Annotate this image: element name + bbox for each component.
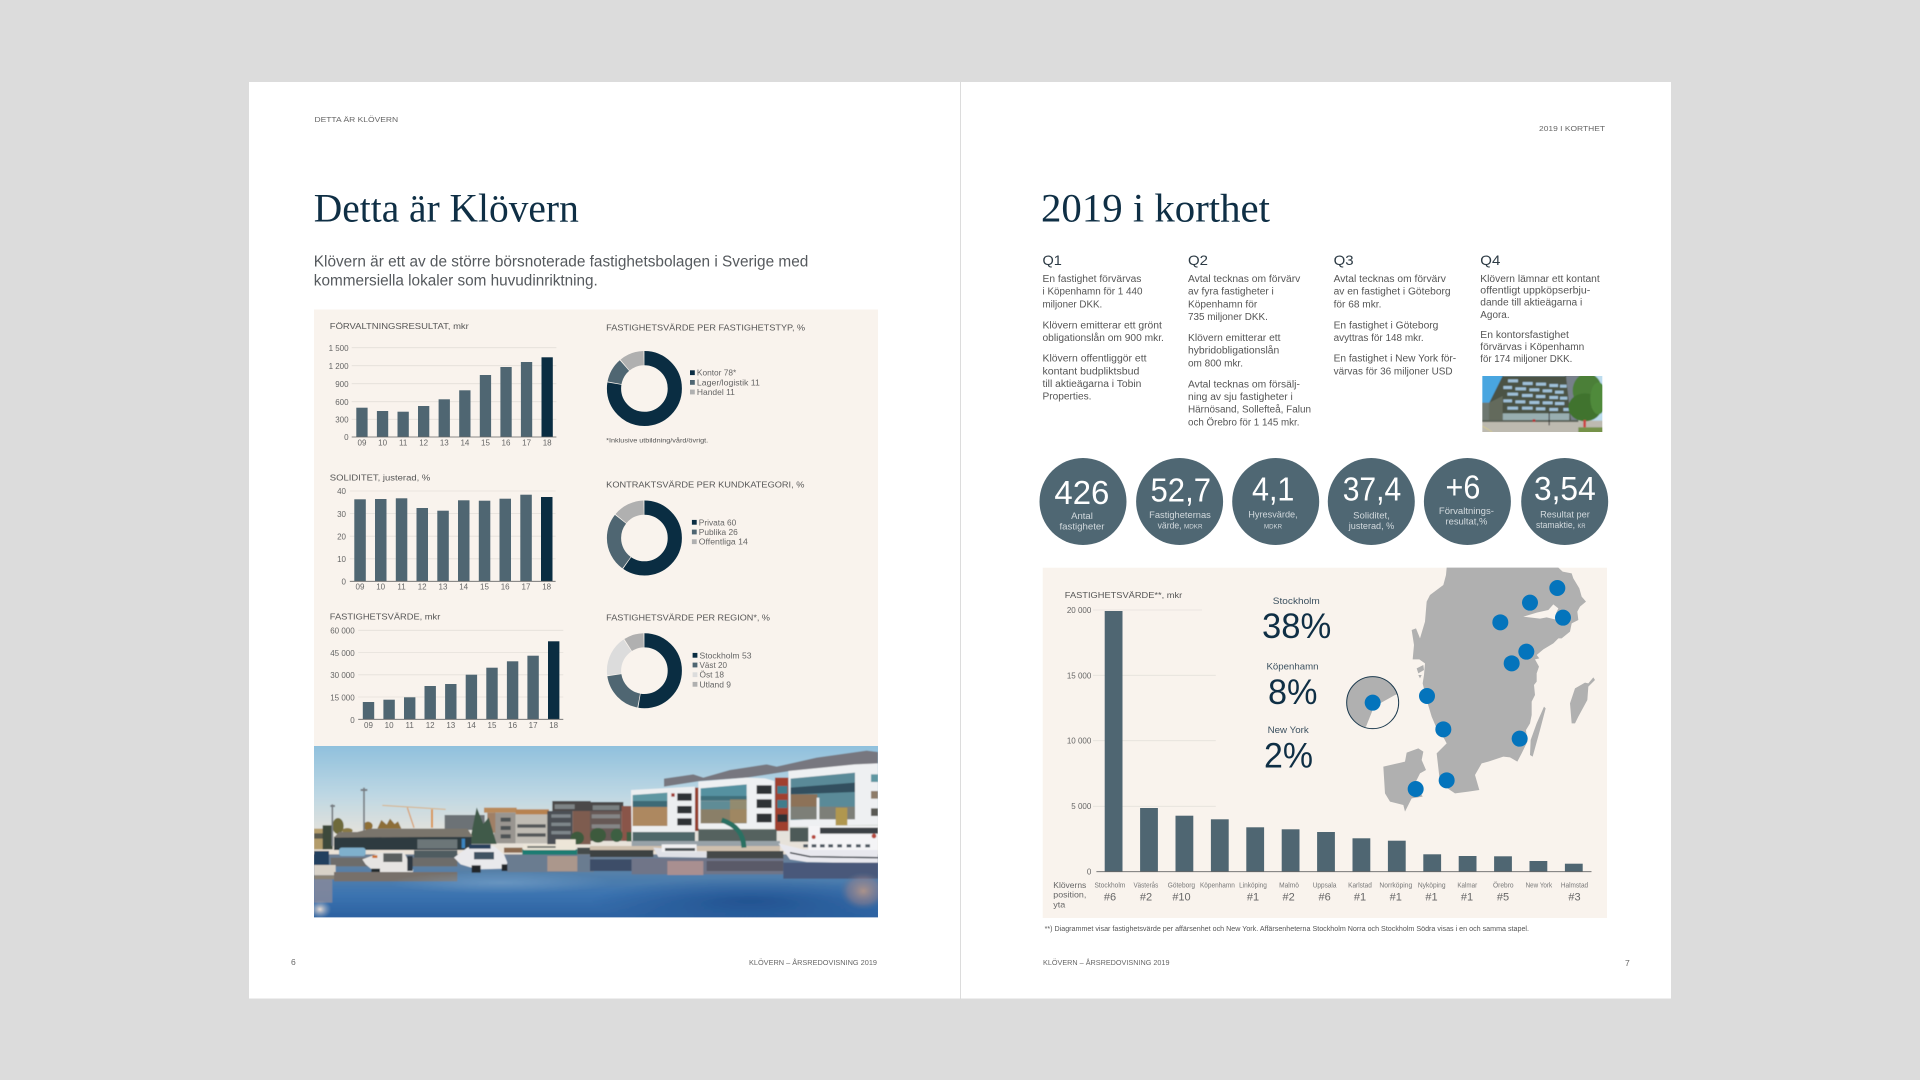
panel: property value chart and map [1043, 568, 1607, 918]
running header left: DETTA ÄR KLÖVERN [314, 115, 398, 124]
text column: Q3: avyttras för 148 mkr. [1334, 333, 1424, 344]
bar chart: fastighetsvärde: 15 [488, 721, 497, 730]
text column: Q4: En kontorsfastighet [1480, 330, 1569, 341]
text column: Q2: ning av sju fastigheter i [1188, 392, 1293, 403]
footer left: KLÖVERN – ÅRSREDOVISNING 2019 [749, 958, 877, 967]
key figure: 52,7 [1136, 458, 1223, 545]
text column: Q1: Klövern offentliggör ett [1042, 354, 1147, 365]
text column: Q4: dande till aktieägarna i [1480, 298, 1582, 309]
text column: Q2: 735 miljoner DKK. [1188, 312, 1268, 323]
key figure: 52,7: 52,7 [1150, 472, 1211, 509]
text column: Q3: En fastighet i Göteborg [1334, 320, 1438, 331]
bar chart: fastighetsvärde per affärsenhet: Kalmar [1457, 882, 1478, 890]
text column: Q3: Avtal tecknas om förvärv [1334, 274, 1446, 285]
donut chart: region: FASTIGHETSVÄRDE PER REGION*, % [606, 612, 770, 622]
text column: Q3: En fastighet i New York för- [1334, 354, 1456, 365]
key figure: 52,7: MDKR [1184, 524, 1203, 530]
text column: Q1: obligationslån om 900 mkr. [1042, 332, 1164, 344]
key figure: 426: 426 [1054, 474, 1109, 511]
text column: Q4: Q4 [1480, 252, 1501, 268]
donut chart: region: Utland 9 [700, 680, 732, 689]
panel: left page [249, 82, 960, 998]
text column: Q4: Klövern lämnar ett kontant [1480, 274, 1600, 285]
bar chart: soliditet: 20 [337, 532, 347, 542]
bar chart: fastighetsvärde per affärsenhet: Linköping [1239, 882, 1267, 890]
text column: Q2: Köpenhamn för [1188, 299, 1258, 310]
callout: Stockholm 38%: 38% [1262, 607, 1331, 646]
bar chart: soliditet: 13 [439, 582, 448, 592]
donut chart: fastighetstyp [606, 322, 806, 444]
bar chart: fastighetsvärde per affärsenhet: #1 [1461, 892, 1473, 904]
bar chart: fastighetsvärde per affärsenhet: #3 [1568, 892, 1581, 904]
donut chart: region: Öst 18 [700, 671, 725, 680]
bar chart: fastighetsvärde: 18 [549, 721, 559, 730]
bar chart: fastighetsvärde per affärsenhet: 0 [1087, 868, 1092, 877]
bar chart: fastighetsvärde per affärsenhet: #1 [1425, 892, 1438, 904]
bar chart: fastighetsvärde: 13 [446, 721, 456, 730]
donut chart: fastighetstyp: Kontor 78* [697, 369, 736, 378]
bar chart: fastighetsvärde: 45 000 [330, 649, 355, 658]
text column: Q3: värvas för 36 miljoner USD [1334, 366, 1453, 377]
bar chart: förvaltningsresultat: FÖRVALTNINGSRESULTAT, mkr [330, 321, 469, 331]
text column: Q3 [1334, 252, 1456, 377]
bar chart: förvaltningsresultat: 600 [335, 398, 349, 407]
bar chart: soliditet: 10 [337, 555, 347, 564]
bar chart: fastighetsvärde: 10 [385, 721, 394, 730]
bar chart: fastighetsvärde per affärsenhet: 15 000 [1067, 671, 1092, 680]
callout: Köpenhamn 8%: Köpenhamn [1266, 661, 1318, 672]
text column: Q2: Q2 [1188, 252, 1208, 268]
bar chart: förvaltningsresultat: 13 [440, 438, 449, 448]
donut chart: kundkategori [606, 480, 805, 568]
bar chart: förvaltningsresultat: 09 [358, 438, 367, 448]
key figure: 37,4: justerad, % [1348, 521, 1394, 531]
text column: Q2: Avtal tecknas om försälj- [1188, 379, 1300, 390]
bar chart: förvaltningsresultat [329, 321, 556, 448]
text column: Q2: Härnösand, Sollefteå, Falun [1188, 404, 1311, 416]
text column: Q4: för 174 miljoner DKK. [1480, 354, 1572, 365]
key figure: +6: resultat,% [1445, 516, 1487, 526]
bar chart: fastighetsvärde per affärsenhet: #6 [1318, 892, 1331, 904]
donut chart: kundkategori: Privata 60 [699, 518, 737, 527]
key figure: +6: Förvaltnings- [1439, 506, 1494, 516]
key figure: 37,4 [1328, 458, 1415, 545]
bar chart: fastighetsvärde per affärsenhet: #2 [1282, 892, 1295, 904]
key figure: 426: Antal [1071, 511, 1093, 521]
key figure: 3,54: KR [1578, 523, 1586, 530]
bar chart: fastighetsvärde: FASTIGHETSVÄRDE, mkr [330, 612, 440, 622]
bar chart: förvaltningsresultat: 16 [502, 438, 511, 448]
bar chart: soliditet: 09 [356, 582, 365, 592]
bar chart: förvaltningsresultat: 900 [335, 380, 349, 389]
key figure: 52,7: värde, [1158, 520, 1182, 530]
text column: Q1: Klövern emitterar ett grönt [1042, 320, 1162, 331]
bar chart: soliditet: 11 [397, 582, 406, 592]
key figure: 37,4: Soliditet, [1353, 510, 1390, 520]
bar chart: fastighetsvärde: 14 [467, 721, 476, 730]
text column: Q1: miljoner DKK. [1042, 299, 1102, 310]
text column: Q4: Agora. [1480, 310, 1510, 321]
donut chart: fastighetstyp: Lager/logistik 11 [697, 378, 760, 387]
intro text: kommersiella lokaler som huvudinriktning. [314, 273, 598, 290]
panel: key figure charts [314, 310, 878, 746]
bar chart: fastighetsvärde: 12 [426, 721, 435, 730]
donut chart: region: Stockholm 53 [700, 651, 752, 660]
bar chart: förvaltningsresultat: 11 [399, 438, 408, 448]
bar chart: fastighetsvärde per affärsenhet: Nyköping [1418, 882, 1446, 890]
key figure: 4,1: MDKR [1264, 524, 1282, 530]
text column: Q2: av fyra fastigheter i [1188, 287, 1274, 298]
text column: Q1: Q1 [1042, 252, 1062, 268]
bar chart: fastighetsvärde per affärsenhet: Uppsala [1313, 882, 1337, 890]
bar chart: fastighetsvärde per affärsenhet: Köpenhamn [1200, 882, 1235, 890]
bar chart: soliditet: 10 [376, 582, 386, 592]
bar chart: fastighetsvärde per affärsenhet: Malmö [1279, 882, 1299, 890]
bar chart: fastighetsvärde per affärsenhet: #1 [1354, 892, 1366, 904]
bar chart: soliditet: SOLIDITET, justerad, % [330, 473, 431, 483]
bar chart: soliditet: 12 [418, 582, 427, 592]
text column: Q3: av en fastighet i Göteborg [1334, 287, 1451, 298]
key figure: 52,7: Fastigheternas [1149, 510, 1211, 520]
footnote: **) Diagrammet visar fastighetsvärde per affärsenhet och New York. Affärsenheterna Stockholm Norra och Stockholm Södra visas i en och samma stapel. [1045, 926, 1529, 933]
left half of the photo, crop coordinates [314, 828, 324, 850]
donut chart: region [606, 612, 770, 701]
bar chart: fastighetsvärde: 11 [406, 721, 414, 730]
bar chart: fastighetsvärde per affärsenhet: Norrköping [1379, 882, 1412, 890]
text column: Q1: Properties. [1042, 392, 1092, 403]
donut chart: region: Väst 20 [700, 661, 728, 670]
callout: New York 2%: New York [1268, 725, 1309, 736]
text column: Q2: Avtal tecknas om förvärv [1188, 274, 1300, 285]
key figure: 4,1: Hyresvärde, [1248, 509, 1298, 519]
text column: Q2 [1188, 252, 1311, 428]
bar chart: soliditet: 0 [342, 578, 347, 586]
panel: right page [961, 82, 1671, 998]
bar chart: fastighetsvärde: 17 [529, 721, 538, 730]
bar chart: fastighetsvärde per affärsenhet [1053, 590, 1592, 909]
text column: Q3: för 68 mkr. [1334, 299, 1381, 310]
text column: Q3: Q3 [1334, 252, 1354, 268]
bar chart: förvaltningsresultat: 18 [543, 438, 552, 448]
bar chart: förvaltningsresultat: 1 200 [329, 362, 349, 371]
right half of the photo, crop coordinates offset by 828 [589, 750, 878, 914]
bar chart: fastighetsvärde per affärsenhet: FASTIGHETSVÄRDE**, mkr [1065, 590, 1182, 600]
text column: Q4 [1480, 252, 1600, 365]
bar chart: fastighetsvärde: 60 000 [330, 626, 355, 636]
running header right: 2019 I KORTHET [1539, 124, 1605, 133]
key figure: 426: fastigheter [1060, 522, 1104, 532]
bar chart: fastighetsvärde: 30 000 [330, 671, 355, 680]
text column: Q4: offentligt uppköpserbju- [1480, 286, 1590, 297]
donut chart: fastighetstyp: *Inklusive utbildning/vård/övrigt. [606, 436, 708, 444]
bar chart: fastighetsvärde per affärsenhet: Klöverns [1053, 880, 1086, 890]
bar chart: förvaltningsresultat: 14 [460, 438, 470, 448]
bar chart: fastighetsvärde: 09 [364, 721, 373, 730]
bar chart: soliditet: 18 [542, 582, 552, 592]
bar chart: fastighetsvärde per affärsenhet: Göteborg [1168, 882, 1195, 890]
bar chart: fastighetsvärde: 0 [350, 716, 355, 725]
bar chart: soliditet [330, 473, 556, 592]
bar chart: fastighetsvärde per affärsenhet: yta [1053, 899, 1066, 909]
bar chart: fastighetsvärde per affärsenhet: Karlstad [1348, 882, 1372, 890]
bar chart: fastighetsvärde per affärsenhet: New York [1526, 882, 1553, 890]
key figure: 4,1: 4,1 [1252, 471, 1294, 508]
key figure: +6 [1424, 458, 1511, 545]
bar chart: fastighetsvärde per affärsenhet: 10 000 [1067, 737, 1092, 746]
page number right: 7 [1625, 958, 1630, 968]
intro text: Klövern är ett av de större börsnoterade fastighetsbolagen i Sverige med [314, 254, 808, 271]
bar chart: soliditet: 30 [337, 510, 347, 519]
bar chart: fastighetsvärde per affärsenhet: #5 [1497, 892, 1509, 904]
photo: harbour with office buildings [314, 746, 878, 918]
bar chart: förvaltningsresultat: 1 500 [329, 344, 349, 353]
inset: Köpenhamn [1346, 676, 1400, 730]
bar chart: förvaltningsresultat: 12 [419, 438, 429, 448]
key figure: +6: +6 [1446, 469, 1480, 506]
key figure: 4,1 [1232, 458, 1319, 545]
page number left: 6 [291, 957, 296, 967]
bar chart: fastighetsvärde: 16 [508, 721, 518, 730]
bar chart: fastighetsvärde per affärsenhet: Örebro [1493, 882, 1514, 890]
text column: Q2: om 800 mkr. [1188, 358, 1243, 369]
bar chart: soliditet: 16 [501, 582, 510, 592]
bar chart: soliditet: 15 [480, 582, 489, 592]
key figure: 3,54: stamaktie, [1536, 520, 1575, 530]
bar chart: fastighetsvärde per affärsenhet: #1 [1390, 892, 1402, 904]
donut chart: fastighetstyp: FASTIGHETSVÄRDE PER FASTIGHETSTYP, % [606, 322, 806, 332]
text column: Q2: Klövern emitterar ett [1188, 333, 1281, 344]
bar chart: fastighetsvärde [330, 612, 563, 730]
bar chart: förvaltningsresultat: 17 [522, 438, 532, 448]
photo: office building [1482, 376, 1602, 432]
bar chart: fastighetsvärde per affärsenhet: 20 000 [1067, 606, 1092, 615]
bar chart: fastighetsvärde per affärsenhet: Halmstad [1561, 882, 1588, 890]
bar chart: fastighetsvärde per affärsenhet: #1 [1247, 892, 1259, 904]
bar chart: fastighetsvärde: 15 000 [330, 694, 355, 702]
key figure: 37,4: 37,4 [1343, 471, 1401, 508]
donut chart: kundkategori: KONTRAKTSVÄRDE PER KUNDKATEGORI, % [606, 480, 805, 490]
bar chart: soliditet: 14 [459, 582, 469, 592]
bar chart: förvaltningsresultat: 0 [344, 433, 349, 442]
intro text [314, 254, 808, 290]
key figure: 3,54: Resultat per [1540, 509, 1590, 519]
bar chart: fastighetsvärde per affärsenhet: 5 000 [1071, 802, 1092, 811]
map: southern Sweden [1343, 568, 1595, 812]
bar chart: soliditet: 17 [522, 582, 531, 592]
bar chart: förvaltningsresultat: 10 [378, 438, 388, 448]
donut chart: fastighetstyp: Handel 11 [697, 388, 735, 397]
key figure: 3,54: 3,54 [1534, 470, 1596, 507]
text column: Q4: förvärvas i Köpenhamn [1480, 342, 1584, 353]
bar chart: förvaltningsresultat: 300 [335, 416, 349, 424]
text column: Q1: En fastighet förvärvas [1042, 274, 1141, 285]
callout: Köpenhamn 8%: 8% [1268, 673, 1318, 712]
bar chart: fastighetsvärde per affärsenhet: position, [1053, 890, 1086, 900]
donut chart: kundkategori: Offentliga 14 [699, 538, 748, 547]
donut chart: kundkategori: Publika 26 [699, 528, 738, 537]
text column: Q2: och Örebro för 1 145 mkr. [1188, 416, 1300, 428]
text column: Q2: hybridobligationslån [1188, 345, 1279, 357]
bar chart: fastighetsvärde per affärsenhet: #6 [1104, 892, 1116, 904]
footer right: KLÖVERN – ÅRSREDOVISNING 2019 [1043, 958, 1170, 967]
callout: New York 2%: 2% [1264, 737, 1313, 776]
text column: Q1: i Köpenhamn för 1 440 [1042, 287, 1143, 298]
text column: Q1 [1042, 252, 1164, 403]
callout: Stockholm 38%: Stockholm [1273, 596, 1320, 607]
bar chart: fastighetsvärde per affärsenhet: #2 [1140, 892, 1152, 904]
bar chart: förvaltningsresultat: 15 [481, 438, 490, 448]
text column: Q1: kontant budpliktsbud [1042, 366, 1139, 377]
title right: 2019 i korthet [1041, 186, 1270, 231]
bar chart: soliditet: 40 [337, 487, 347, 496]
title left: Detta är Klövern [314, 186, 579, 231]
text column: Q1: till aktieägarna i Tobin [1042, 379, 1141, 390]
bar chart: fastighetsvärde per affärsenhet: #10 [1172, 892, 1191, 904]
key figure: 426 [1040, 458, 1126, 545]
key figure: 3,54 [1521, 458, 1608, 545]
bar chart: fastighetsvärde per affärsenhet: Västerås [1133, 882, 1159, 890]
bar chart: fastighetsvärde per affärsenhet: Stockholm [1094, 882, 1125, 890]
